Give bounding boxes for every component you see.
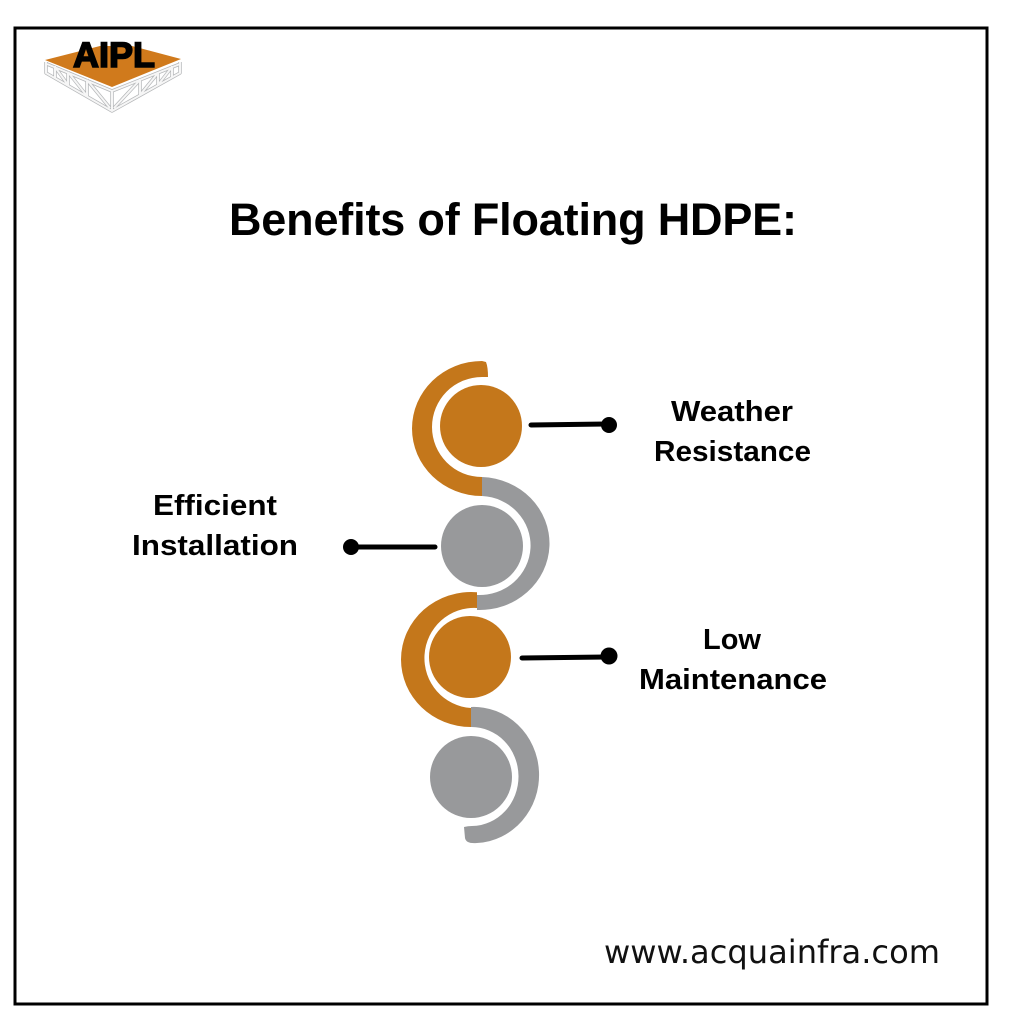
segment 2: gray arc [477,477,550,610]
label: Weather Resistance [654,396,811,468]
label: Low Maintenance: Low [703,624,761,656]
diagram: stacked circles [401,361,550,843]
connector: Weather Resistance [531,417,617,433]
segment 4: gray arc [464,707,539,843]
connector: Low Maintenance [522,648,618,664]
label: Efficient Installation: Installation [132,530,298,562]
logo: AIPL platform [45,36,181,111]
label: Efficient Installation [132,490,298,562]
segment 1: orange circle [440,385,522,467]
connector: Efficient Installation [343,539,435,555]
label: Weather Resistance: Weather [671,396,793,428]
label: Low Maintenance: Maintenance [639,664,827,696]
label: Low Maintenance [639,624,827,696]
logo lettering: AIPL [73,36,155,75]
segment 3: orange arc [401,592,477,727]
logo truss base [46,62,180,111]
label: Efficient Installation: Efficient [153,490,277,522]
segment 1: orange arc [412,361,488,496]
segment 2: gray circle [441,505,523,587]
segment 4: gray circle [430,736,512,818]
segment 3: orange circle [429,616,511,698]
title: Benefits of Floating HDPE: [229,194,797,245]
logo orange deck [45,46,181,87]
label: Weather Resistance: Resistance [654,436,811,468]
website url: www.acquainfra.com [604,933,940,971]
